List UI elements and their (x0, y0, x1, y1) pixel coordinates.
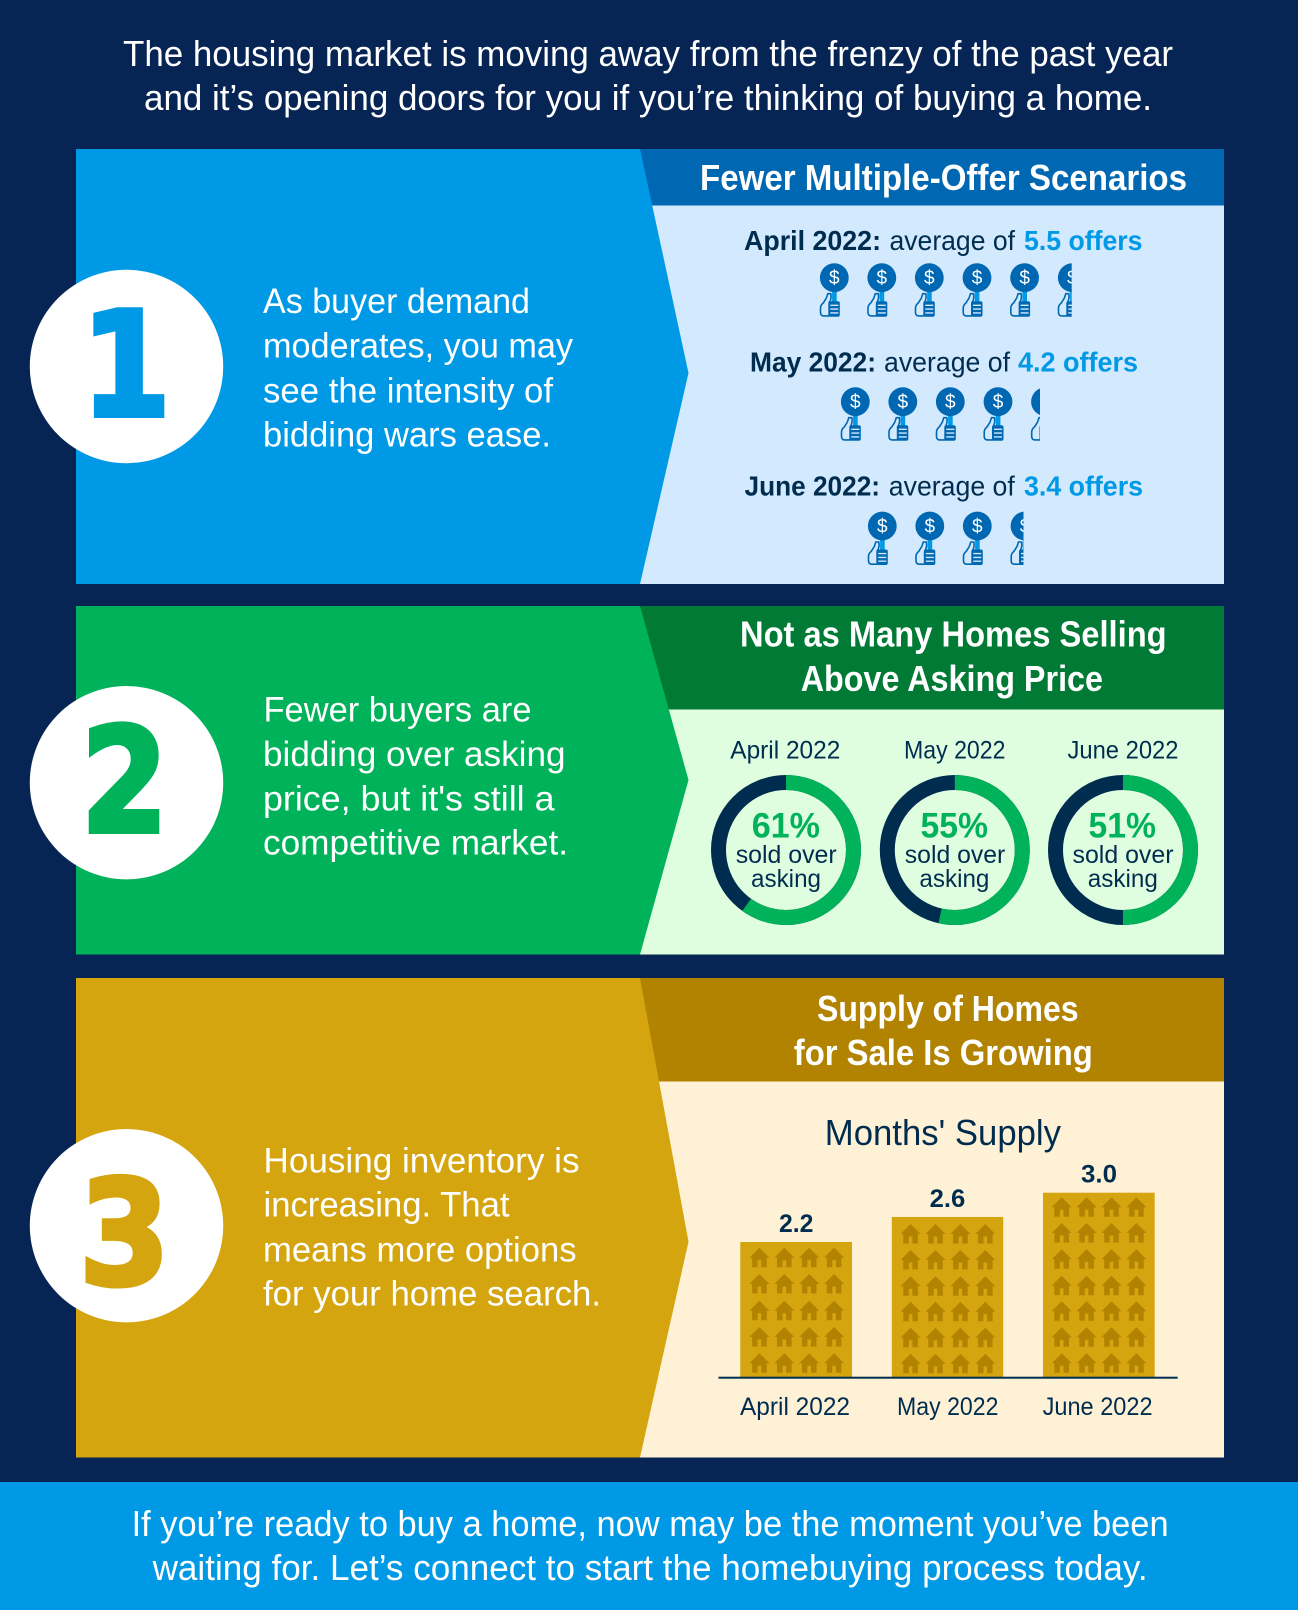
panel 2 data background (640, 606, 1224, 954)
panel 3 heading: for Sale Is Growing (794, 1032, 1093, 1073)
footer call to action: waiting for. Let’s connect to start the homebuying process today. (152, 1547, 1148, 1588)
April offer icons: 5.5 (820, 263, 1087, 317)
bar: May 2.6: 2.6 (930, 1185, 965, 1213)
panel 3 description (263, 1142, 601, 1314)
donut: April 61%: asking (751, 865, 821, 893)
number badge 3: 3 (79, 1150, 170, 1319)
intro text: The housing market is moving away from the frenzy of the past year (123, 33, 1173, 74)
May offers line: 4.2 offers (1018, 347, 1138, 378)
donut: June 51%: 51% (1088, 806, 1156, 845)
panel 2 heading: Above Asking Price (801, 658, 1103, 699)
panel 1 description: As buyer demand (263, 282, 530, 321)
bar: April 2.2: April 2022 (740, 1393, 850, 1421)
panel 2 arrow block (76, 606, 688, 954)
May offer icons: 4.2 (841, 387, 1060, 441)
May offers line: May 2022: (750, 347, 876, 378)
panel 2 header bar (640, 606, 1224, 710)
icon: offer (963, 512, 992, 565)
donut: June 51%: June 2022 (1068, 736, 1178, 764)
April offers line (744, 225, 1142, 256)
panel 2: above asking price (30, 606, 1224, 954)
panel 3 header bar (640, 978, 1224, 1082)
panel 1: multiple offers (30, 149, 1224, 584)
bar chart: months' supply (718, 1161, 1178, 1421)
number badge 1: 1 (81, 282, 171, 450)
panel 3: supply of homes (30, 978, 1224, 1458)
icon: offer: $ (924, 268, 935, 289)
May offers line (750, 347, 1138, 378)
donut: May 55%: 55% (920, 806, 988, 845)
bar: May 2.6 (892, 1185, 1003, 1421)
panel 3 description: for your home search. (263, 1275, 601, 1314)
panel 3 heading: Supply of Homes (817, 988, 1079, 1029)
icon: offer (915, 263, 944, 317)
footer call to action (132, 1503, 1169, 1588)
icon: offer (841, 387, 870, 441)
number badge 2 (30, 686, 223, 879)
June offers line: average of (889, 470, 1015, 502)
donut: May 55% (887, 736, 1022, 918)
panel 2 description: Fewer buyers are (264, 691, 532, 730)
donut: June 51%: asking (1088, 865, 1158, 893)
footer call to action: If you’re ready to buy a home, now may be the moment you’ve been (132, 1503, 1169, 1544)
icon: offer: $ (850, 392, 861, 413)
panel 1 heading: Fewer Multiple-Offer Scenarios (700, 157, 1187, 198)
donut: April 61% (718, 736, 854, 918)
panel 3 description: means more options (263, 1231, 576, 1270)
icon: offer: $ (972, 516, 983, 538)
icon: partial offer: $ (1020, 516, 1031, 538)
bar: June 3.0 (1043, 1161, 1155, 1421)
icon: offer (1010, 263, 1039, 317)
icon: offer (936, 387, 965, 441)
panel 1 description: moderates, you may (263, 326, 573, 366)
June offer icons: 3.4 (868, 512, 1039, 565)
icon: offer: $ (829, 268, 840, 289)
icon: offer: $ (993, 392, 1004, 413)
icon: offer: $ (1019, 268, 1030, 289)
panel 1 data background (640, 149, 1224, 584)
icon: partial offer: $ (1040, 392, 1051, 413)
panel 1 description (263, 282, 573, 454)
donut: April 61%: 61% (752, 806, 820, 845)
icon: partial offer: $ (1067, 268, 1078, 289)
icon: offer (868, 512, 897, 565)
donut: June 51%: sold over (1072, 841, 1174, 869)
June offers line (744, 470, 1143, 502)
panel 2 description (263, 691, 568, 862)
donut: May 55%: asking (919, 865, 989, 893)
May offers line: average of (884, 347, 1010, 378)
panel 2 description: competitive market. (263, 823, 568, 862)
panel 2 heading (740, 614, 1167, 699)
donut: April 61%: sold over (736, 841, 837, 869)
donut: June 51% (1056, 736, 1190, 918)
icon: partial offer (1010, 512, 1024, 565)
icon: partial offer (1058, 263, 1072, 317)
icon: offer (963, 263, 991, 317)
panel 1 arrow block (76, 149, 688, 584)
icon: partial offer (1030, 388, 1040, 441)
icon: offer (820, 263, 849, 317)
icon: offer: $ (925, 516, 936, 538)
bar: June 3.0: 3.0 (1081, 1161, 1117, 1189)
number badge 2: 2 (81, 698, 168, 866)
icon: offer: $ (972, 268, 983, 289)
intro text (123, 33, 1173, 118)
donut: May 55%: May 2022 (904, 736, 1006, 764)
panel 2 description: bidding over asking (263, 735, 566, 774)
icon: offer (888, 387, 917, 441)
icon: offer: $ (877, 268, 888, 289)
panel 1 header bar (640, 149, 1224, 206)
number badge 3 (30, 1129, 223, 1322)
icon: offer: $ (898, 392, 909, 413)
donut: April 61%: April 2022 (730, 736, 840, 764)
April offers line: April 2022: (744, 225, 881, 256)
panel 3 description: increasing. That (264, 1186, 510, 1225)
intro text: and it’s opening doors for you if you’re thinking of buying a home. (144, 77, 1152, 118)
bar: May 2.6: May 2022 (897, 1393, 998, 1421)
donut: May 55%: sold over (905, 841, 1005, 869)
panel 3 data background (640, 978, 1224, 1458)
April offers line: 5.5 offers (1024, 225, 1142, 256)
June offers line: June 2022: (744, 470, 880, 502)
icon: offer (984, 387, 1012, 441)
panel 3 heading (794, 988, 1093, 1073)
panel 2 description: price, but it's still a (263, 779, 555, 818)
number badge 1 (30, 270, 223, 463)
panel 2 heading: Not as Many Homes Selling (740, 614, 1167, 655)
chart title: Months' Supply (825, 1112, 1061, 1153)
panel 3 arrow block (76, 978, 688, 1458)
April offers line: average of (890, 225, 1015, 256)
icon: offer: $ (945, 392, 956, 413)
icon: offer: $ (877, 516, 888, 538)
panel 3 description: Housing inventory is (264, 1142, 580, 1181)
icon: offer (915, 512, 944, 565)
June offers line: 3.4 offers (1024, 470, 1143, 502)
panel 1 description: see the intensity of (263, 372, 553, 410)
icon: offer (867, 263, 896, 317)
bar: April 2.2: 2.2 (779, 1210, 813, 1238)
bar: June 3.0: June 2022 (1043, 1393, 1153, 1421)
panel 1 description: bidding wars ease. (263, 416, 551, 454)
footer band (0, 1482, 1298, 1610)
bar: April 2.2 (740, 1210, 852, 1421)
